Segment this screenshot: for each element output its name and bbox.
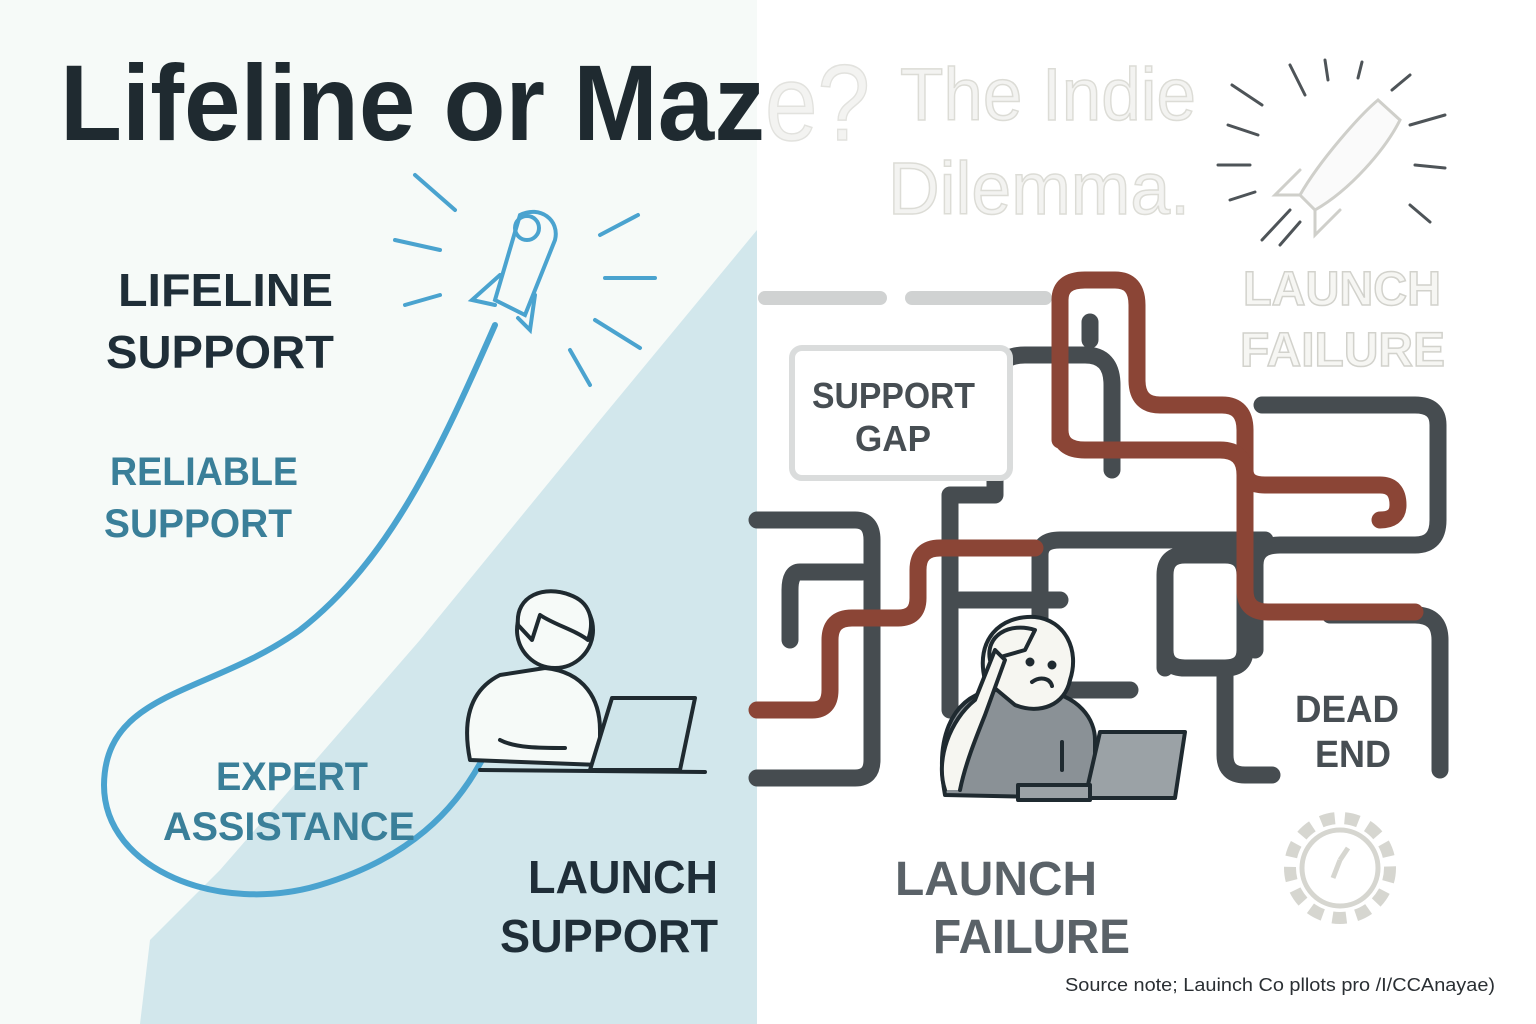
text block: launch failure bottom: LAUNCH bbox=[895, 853, 1097, 906]
text block: launch failure faint top right bbox=[1240, 263, 1445, 377]
text block: reliable support: RELIABLE bbox=[110, 450, 298, 494]
title: Dilemma. bbox=[888, 147, 1190, 230]
text block: launch support bbox=[500, 851, 718, 962]
callout: support gap box: SUPPORT bbox=[812, 375, 975, 416]
text block: lifeline support: LIFELINE bbox=[118, 264, 333, 316]
source note: Source note; Lauinch Co pllots pro /I/CCAnayae) bbox=[1065, 975, 1495, 995]
text block: reliable support bbox=[104, 450, 298, 546]
panel: left lifeline background bbox=[0, 0, 757, 1024]
icon: gray rocket outline top right bbox=[1218, 60, 1445, 245]
text block: dead end bbox=[1295, 689, 1399, 776]
text block: expert assistance: ASSISTANCE bbox=[163, 805, 415, 849]
title: The Indie bbox=[900, 53, 1196, 136]
icon: blue rocket with rays bbox=[395, 175, 655, 385]
text block: lifeline support: SUPPORT bbox=[106, 326, 334, 378]
icon: distressed person at laptop bbox=[942, 617, 1185, 800]
text block: launch failure faint top right: LAUNCH bbox=[1243, 263, 1441, 316]
text block: dead end: END bbox=[1315, 734, 1391, 776]
text block: launch failure faint top right: FAILURE bbox=[1240, 324, 1445, 377]
text block: expert assistance: EXPERT bbox=[216, 755, 368, 799]
panel: right maze background bbox=[757, 0, 1536, 1024]
chart: maze bbox=[757, 280, 1440, 778]
chart: blue rocket trajectory line bbox=[104, 325, 495, 894]
title: Lifeline or Maz bbox=[60, 42, 765, 163]
callout: support gap box bbox=[792, 348, 1010, 478]
text block: launch failure bottom: FAILURE bbox=[933, 911, 1130, 964]
text block: launch failure bottom bbox=[895, 853, 1130, 964]
text block: launch support: SUPPORT bbox=[500, 910, 718, 962]
text block: reliable support: SUPPORT bbox=[104, 502, 292, 546]
text block: lifeline support bbox=[106, 264, 334, 378]
text block: expert assistance bbox=[163, 755, 415, 849]
text block: launch support: LAUNCH bbox=[528, 851, 718, 903]
icon: person at laptop (confident) bbox=[467, 591, 705, 772]
icon: faint gear bbox=[1290, 818, 1390, 918]
callout: support gap box: GAP bbox=[855, 418, 931, 459]
title bbox=[60, 42, 1196, 230]
title: e? bbox=[765, 42, 870, 163]
text block: dead end: DEAD bbox=[1295, 689, 1399, 731]
